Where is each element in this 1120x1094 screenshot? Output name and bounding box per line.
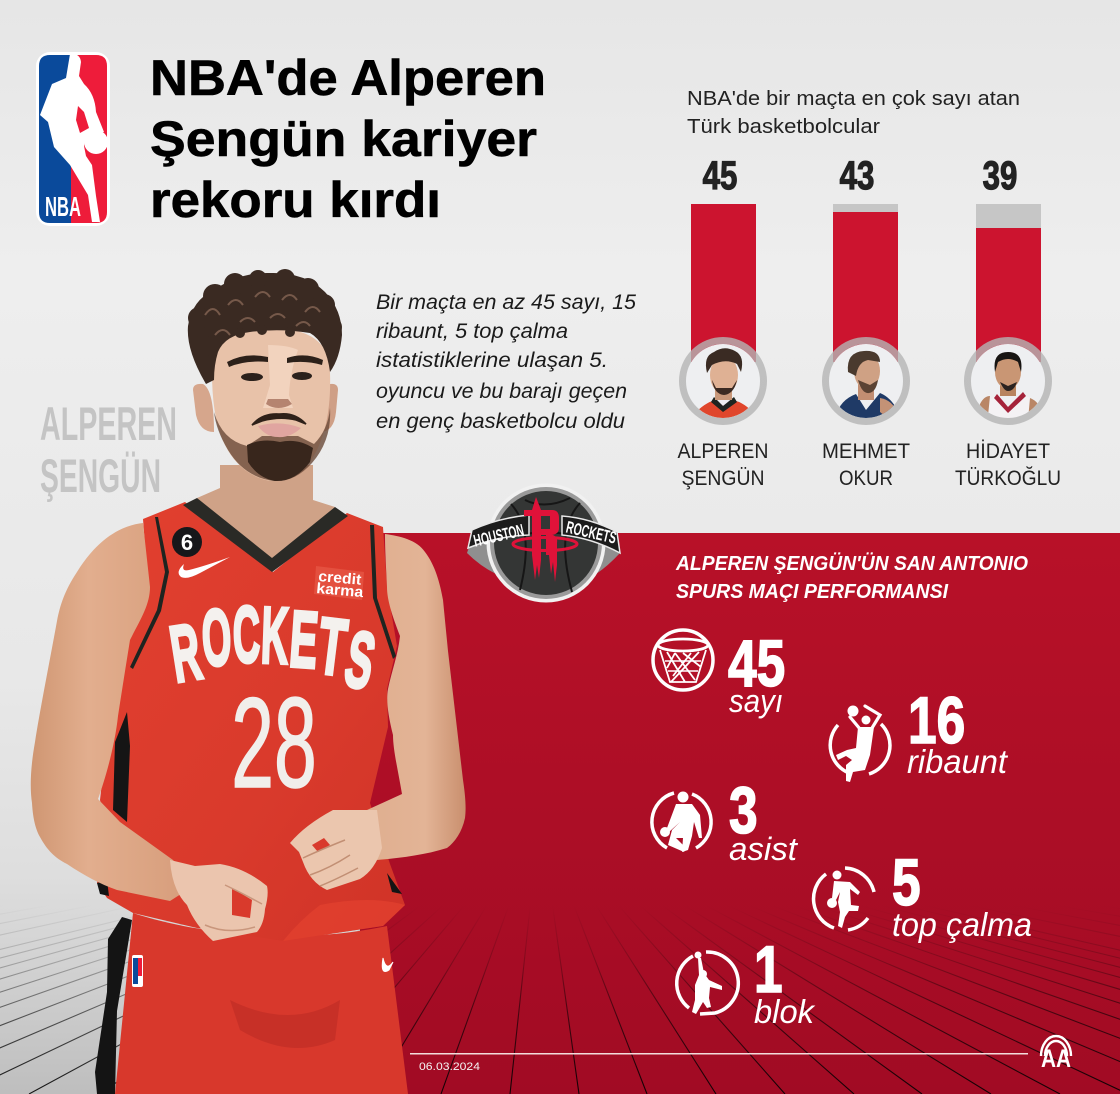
- nike swoosh: [179, 557, 230, 578]
- bar: Hidayet Türkoğlu 39: HİDAYET: [966, 440, 1050, 463]
- stat: 45 sayı: [653, 626, 785, 719]
- badge 6: 6: [181, 530, 193, 555]
- goatee: [247, 441, 313, 481]
- bar: Alperen Şengün 45: 45: [703, 153, 737, 198]
- banner right: [562, 516, 620, 553]
- jersey wordmark ROCKETS: C: [232, 590, 261, 680]
- player name label: [40, 397, 177, 502]
- stat: 5 top çalma: top çalma: [892, 906, 1032, 943]
- bar: Mehmet Okur 43: 43: [840, 153, 874, 198]
- description text: Bir maçta en az 45 sayı, 15: [376, 291, 636, 314]
- chart title: Türk basketbolcular: [687, 116, 880, 138]
- bar chart: Turkish players top scores: [678, 153, 1061, 490]
- jersey: [97, 498, 405, 941]
- player name label: ALPEREN: [40, 397, 177, 450]
- shorts: [95, 913, 408, 1094]
- banner left: HOUSTON: [472, 521, 526, 551]
- stat: 45 sayı: sayı: [729, 683, 783, 719]
- date: 06.03.2024: [419, 1061, 480, 1073]
- armhole piping: [130, 517, 396, 669]
- bar: Mehmet Okur 43: OKUR: [839, 467, 893, 490]
- collar: [183, 498, 348, 572]
- bar: Mehmet Okur 43: [822, 153, 910, 490]
- stat: 1 blok: 1: [754, 932, 783, 1006]
- description text: en genç basketbolcu oldu: [376, 410, 625, 433]
- stat: 5 top çalma: 5: [892, 845, 921, 919]
- bar: Hidayet Türkoğlu 39: TÜRKOĞLU: [955, 467, 1061, 490]
- logo: AA: [1041, 1036, 1071, 1073]
- title: rekoru kırdı: [150, 172, 441, 228]
- player figure: [31, 269, 466, 1094]
- left arm: [31, 523, 195, 901]
- stat: 3 asist: asist: [729, 831, 798, 867]
- stubble: [214, 408, 330, 481]
- jersey wordmark ROCKETS: [165, 590, 382, 707]
- icon: steal player: [814, 868, 874, 930]
- jersey wordmark ROCKETS: K: [260, 591, 290, 681]
- performance heading: ALPEREN ŞENGÜN'ÜN SAN ANTONIO: [675, 552, 1028, 575]
- banner right: ROCKETS: [564, 518, 618, 548]
- right hand: [290, 810, 382, 890]
- bar: Alperen Şengün 45: ALPEREN: [678, 440, 768, 463]
- sponsor: karma: [316, 580, 365, 601]
- jersey wordmark ROCKETS: E: [287, 593, 321, 685]
- R mark: [513, 497, 577, 582]
- description text: oyuncu ve bu barajı geçen: [376, 380, 627, 403]
- stat: 1 blok: [677, 932, 815, 1030]
- banner left: [468, 515, 529, 551]
- title: [150, 50, 546, 228]
- stat: 16 ribaunt: [830, 683, 1009, 782]
- performance heading: [675, 552, 1028, 603]
- bar: Alperen Şengün 45: [678, 153, 768, 490]
- neck: [197, 465, 335, 570]
- stat: 1 blok: blok: [754, 993, 815, 1030]
- right arm: [365, 534, 466, 860]
- icon: rebound player: [830, 706, 890, 782]
- footer rule: [410, 1053, 1028, 1054]
- chart title: NBA'de bir maçta en çok sayı atan: [687, 88, 1020, 110]
- hair: [188, 269, 342, 384]
- description text: [376, 291, 636, 433]
- title: NBA'de Alperen: [150, 50, 546, 106]
- head: [193, 328, 338, 481]
- logo: Houston Rockets: [467, 484, 620, 602]
- logo: AA: AA: [1041, 1045, 1071, 1073]
- stat: 5 top çalma: [814, 845, 1032, 943]
- sponsor: [314, 566, 365, 601]
- bar: Hidayet Türkoğlu 39: [955, 153, 1061, 490]
- chart title: [687, 88, 1020, 138]
- side panel: [113, 712, 130, 822]
- description text: ribaunt, 5 top çalma: [376, 320, 568, 343]
- description text: istatistiklerine ulaşan 5.: [376, 349, 608, 372]
- icon: block player: [677, 952, 738, 1014]
- stat: 3 asist: [652, 773, 798, 867]
- badge 6: [172, 527, 202, 557]
- stat: 45 sayı: 45: [728, 626, 785, 700]
- stat: 16 ribaunt: 16: [908, 683, 965, 757]
- icon: hoop: [653, 630, 713, 690]
- jersey number 28: 28: [231, 672, 317, 815]
- bar: Alperen Şengün 45: ŞENGÜN: [682, 467, 764, 490]
- panel: red performance background: [360, 533, 1120, 1094]
- NBA shorts badge: [132, 955, 143, 987]
- performance heading: SPURS MAÇI PERFORMANSI: [676, 581, 948, 603]
- wooden floor lines: [0, 880, 1120, 1094]
- sponsor: credit: [318, 568, 362, 589]
- jersey wordmark ROCKETS: R: [165, 608, 207, 700]
- stat: 16 ribaunt: ribaunt: [907, 743, 1009, 780]
- jersey wordmark ROCKETS: T: [313, 600, 351, 693]
- icon: dribbling player: [652, 792, 711, 852]
- stat: 3 asist: 3: [729, 773, 758, 847]
- player name label: ŞENGÜN: [40, 449, 161, 502]
- logo: NBA: NBA: [45, 191, 81, 222]
- jersey wordmark ROCKETS: O: [200, 593, 234, 684]
- bar: Mehmet Okur 43: MEHMET: [822, 440, 910, 463]
- title: Şengün kariyer: [150, 111, 537, 167]
- logo: NBA: [36, 52, 110, 226]
- bar: Hidayet Türkoğlu 39: 39: [983, 153, 1017, 198]
- jersey wordmark ROCKETS: S: [339, 615, 382, 707]
- left hand: [170, 860, 268, 941]
